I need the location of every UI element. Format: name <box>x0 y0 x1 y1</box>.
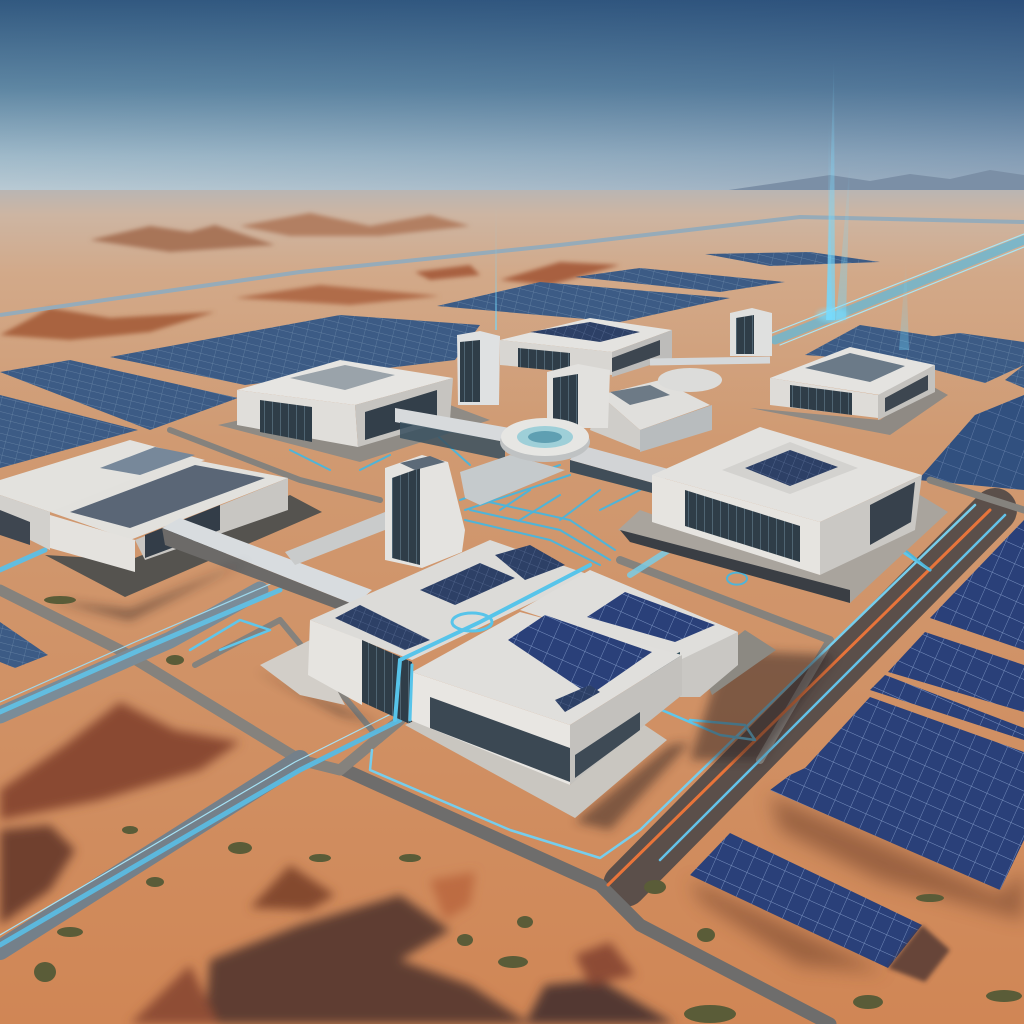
tower: front <box>385 455 465 568</box>
building: back right <box>750 347 948 435</box>
desert shrubs <box>34 596 1022 1023</box>
building: left middle <box>218 360 490 462</box>
tower: back right <box>730 308 772 356</box>
central plaza conduits <box>290 420 930 585</box>
mid white building behind hub <box>590 360 770 452</box>
solar fields: near right <box>690 520 1024 982</box>
tower: back centre <box>457 331 500 405</box>
bridges and central hub <box>395 408 672 505</box>
panel ground shadows <box>690 795 1024 972</box>
far road <box>0 217 1024 315</box>
distant mountains <box>715 170 1024 196</box>
road network <box>0 430 1024 1024</box>
blue conduit across main building <box>395 565 590 720</box>
tower: centre <box>547 364 610 428</box>
orange and blue utility lines <box>0 234 1024 945</box>
solar fields: far and middle <box>0 252 1024 668</box>
glowing data beams <box>495 55 909 350</box>
sky <box>0 0 1024 195</box>
main building: front block <box>405 612 682 818</box>
building: back centre <box>500 318 672 377</box>
main building: rear wing <box>520 570 776 705</box>
main building shadows <box>50 560 835 830</box>
main building: left wing <box>260 540 590 725</box>
building: far left <box>0 440 322 597</box>
distant dunes <box>0 213 620 340</box>
white elevated walkway <box>162 512 385 612</box>
building: right front <box>618 427 948 603</box>
foreground rock formations <box>0 702 675 1024</box>
